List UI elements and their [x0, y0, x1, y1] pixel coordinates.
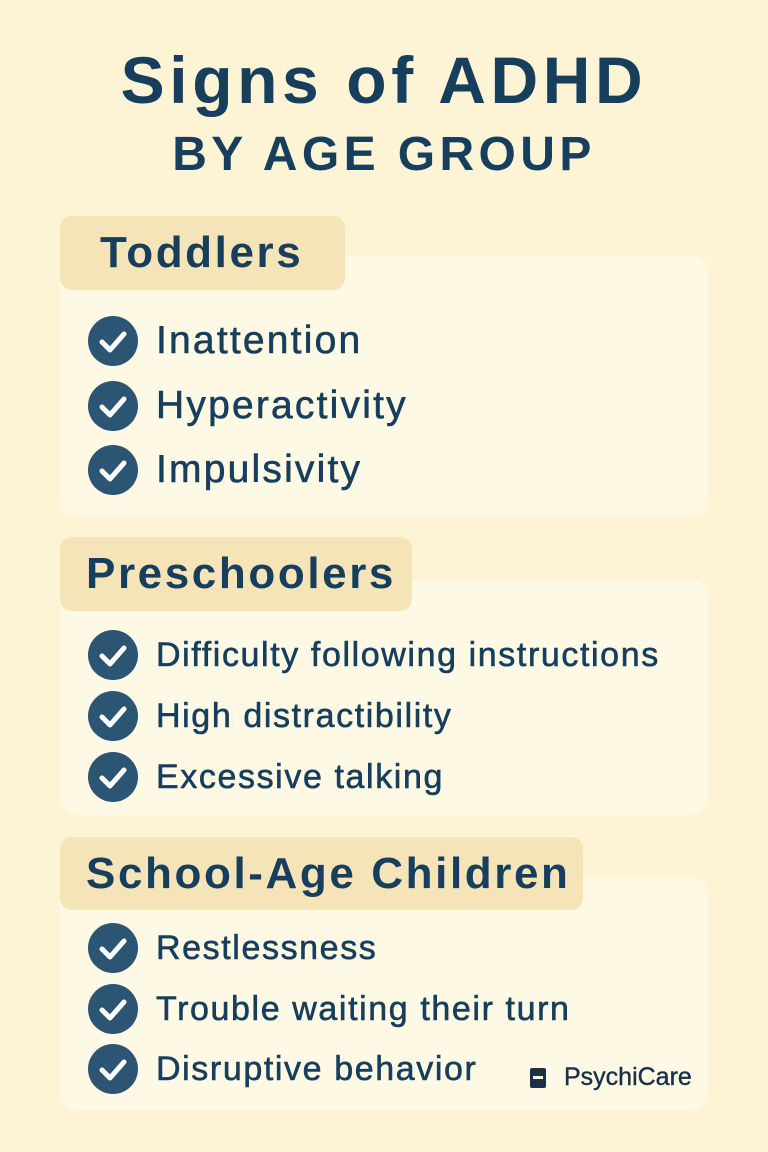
item: hyperactivity	[88, 381, 408, 431]
heading: school-age children	[60, 837, 583, 910]
panel: toddlers	[60, 256, 708, 516]
item: trouble waiting	[88, 984, 571, 1034]
item: inattention	[88, 316, 362, 366]
panel: preschoolers	[60, 580, 708, 815]
icon: logo mark	[530, 1068, 546, 1088]
item: difficulty following instructions	[88, 630, 660, 680]
panel: school-age	[60, 877, 708, 1110]
item: difficulty following instructions: Difficulty following instructions	[156, 636, 660, 674]
heading: school-age children: School-Age Children	[86, 848, 571, 898]
heading: preschoolers: Preschoolers	[86, 549, 396, 598]
subtitle: BY AGE GROUP	[172, 128, 596, 181]
item: disruptive behavior	[88, 1044, 477, 1094]
item: impulsivity	[88, 445, 362, 495]
item: hyperactivity: Hyperactivity	[156, 384, 408, 427]
item: excessive talking: Excessive talking	[156, 758, 444, 796]
heading: toddlers: Toddlers	[100, 228, 303, 277]
heading: toddlers	[60, 216, 345, 290]
logo: PsychiCare: PsychiCare	[564, 1063, 692, 1091]
item: high distractibility: High distractibility	[156, 696, 453, 734]
title: Signs of ADHD	[121, 43, 647, 117]
item: restlessness: Restlessness	[156, 928, 377, 966]
item: trouble waiting: Trouble waiting their turn	[156, 990, 571, 1028]
item: disruptive behavior: Disruptive behavior	[156, 1050, 477, 1088]
item: impulsivity: Impulsivity	[156, 448, 362, 491]
heading: preschoolers	[60, 537, 412, 611]
item: inattention: Inattention	[156, 319, 362, 362]
item: excessive talking	[88, 752, 444, 802]
item: high distractibility	[88, 691, 453, 741]
item: restlessness	[88, 923, 377, 973]
